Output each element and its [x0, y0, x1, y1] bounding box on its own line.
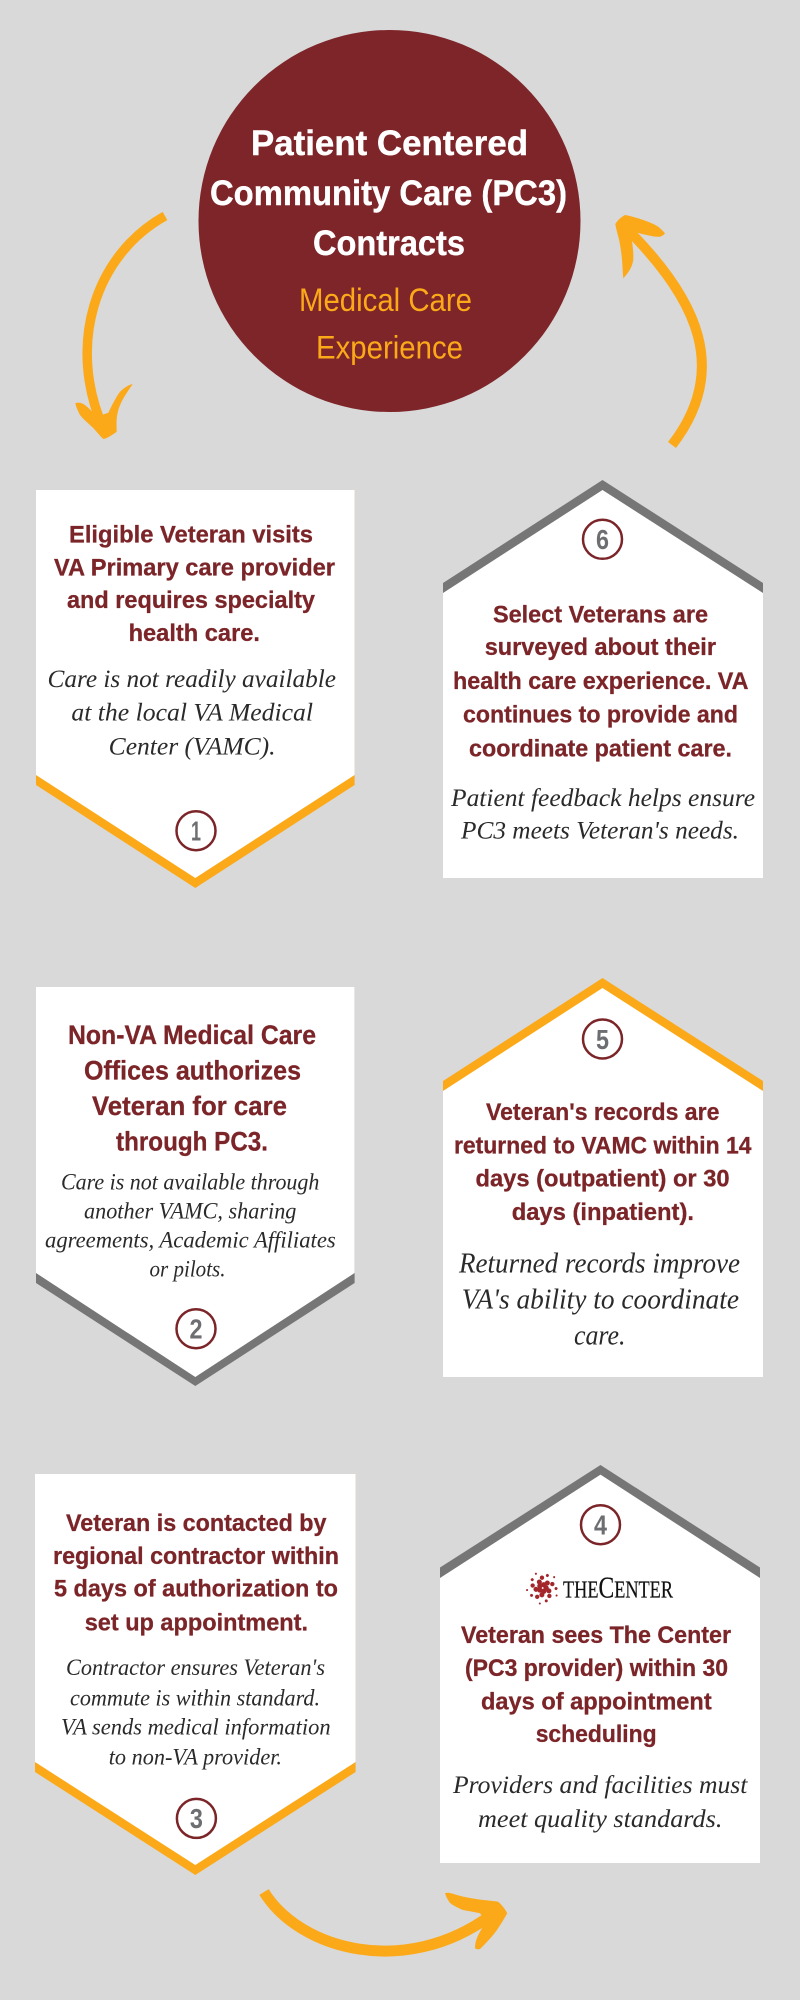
step 5 description: Returned records improve [458, 1249, 740, 1280]
step 5 heading: days (inpatient). [512, 1199, 694, 1226]
step 3 heading [53, 1510, 339, 1637]
step 5 description [458, 1249, 740, 1352]
step 3 number [177, 1799, 216, 1838]
step 4 number: 4 [594, 1510, 607, 1540]
step 3 number: 3 [190, 1803, 203, 1834]
step 6 description: Patient feedback helps ensure [450, 785, 755, 812]
step 3 heading: 5 days of authorization to [54, 1576, 338, 1603]
step 1 description: Care is not readily available [48, 666, 336, 693]
arrow: circle to step 1 [75, 216, 165, 439]
step 2 number [176, 1309, 216, 1348]
step 1 heading: health care. [129, 620, 260, 647]
subtitle [299, 282, 472, 366]
step 2 description: agreements, Academic Affiliates [45, 1227, 336, 1252]
logo: The Center: THECENTER [563, 1569, 673, 1604]
title: Contracts [313, 224, 465, 263]
step 4 heading: (PC3 provider) within 30 [465, 1655, 728, 1682]
step 1 description: Center (VAMC). [109, 734, 276, 761]
step 4 description [452, 1772, 748, 1833]
step 2 heading: Non-VA Medical Care [68, 1020, 316, 1050]
step 4 heading: days of appointment [481, 1689, 712, 1716]
step 2 heading: Offices authorizes [84, 1055, 301, 1085]
title: Patient Centered [251, 124, 528, 163]
step 1 description: at the local VA Medical [71, 700, 313, 727]
panel: step 6 [443, 480, 763, 878]
step 4 heading: scheduling [536, 1721, 657, 1748]
subtitle: Experience [316, 330, 463, 366]
step 1 heading: Eligible Veteran visits [69, 522, 313, 549]
step 3 heading: Veteran is contacted by [66, 1510, 327, 1537]
arrow: step 6 to circle [615, 215, 702, 445]
step 5 number [583, 1020, 622, 1058]
panel: step 2 [36, 987, 355, 1386]
step 6 heading [453, 602, 749, 763]
step 1 description [48, 666, 336, 761]
step 2 description: or pilots. [150, 1257, 226, 1282]
step 3 description: commute is within standard. [70, 1685, 320, 1710]
title circle [198, 30, 580, 412]
step 2 heading: Veteran for care [92, 1091, 287, 1121]
arrow: step 3 to step 4 [264, 1892, 507, 1951]
step 3 description: to non-VA provider. [109, 1744, 282, 1769]
step 2 description: Care is not available through [61, 1169, 319, 1194]
step 6 heading: health care experience. VA [453, 668, 749, 695]
subtitle: Medical Care [299, 282, 472, 318]
step 2 description [45, 1169, 336, 1282]
step 4 number [581, 1505, 620, 1544]
title [210, 124, 567, 263]
step 1 heading: and requires specialty [67, 587, 315, 614]
step 3 heading: regional contractor within [53, 1543, 339, 1570]
step 5 heading: returned to VAMC within 14 [454, 1133, 752, 1160]
step 1 number [176, 811, 216, 850]
step 6 heading: continues to provide and [463, 702, 738, 729]
step 5 heading: days (outpatient) or 30 [476, 1166, 730, 1193]
step 1 number: 1 [191, 816, 201, 846]
step 3 description: Contractor ensures Veteran's [66, 1655, 325, 1680]
step 1 heading [54, 522, 335, 647]
step 2 heading [68, 1020, 316, 1157]
step 2 heading: through PC3. [116, 1127, 268, 1157]
step 3 description [61, 1655, 331, 1769]
step 2 description: another VAMC, sharing [84, 1198, 296, 1223]
step 5 number: 5 [596, 1024, 609, 1055]
step 5 description: VA's ability to coordinate [462, 1285, 739, 1316]
panel: step 4 [440, 1465, 760, 1863]
panel: step 5 [443, 978, 763, 1377]
step 2 number: 2 [190, 1314, 202, 1344]
step 4 heading [461, 1622, 731, 1748]
panel: step 1 [36, 490, 355, 888]
step 1 heading: VA Primary care provider [54, 555, 335, 582]
step 6 description [450, 785, 755, 845]
step 5 heading [454, 1099, 752, 1226]
step 6 number [583, 520, 622, 559]
logo: The Center [526, 1569, 673, 1605]
step 5 description: care. [574, 1321, 626, 1352]
step 4 heading: Veteran sees The Center [461, 1622, 731, 1649]
step 6 heading: Select Veterans are [493, 602, 708, 629]
step 6 heading: surveyed about their [485, 634, 716, 661]
step 4 description: meet quality standards. [478, 1806, 722, 1833]
title: Community Care (PC3) [210, 174, 567, 213]
panel: step 3 [35, 1474, 356, 1875]
step 4 description: Providers and facilities must [452, 1772, 748, 1799]
step 6 heading: coordinate patient care. [469, 736, 732, 763]
step 5 heading: Veteran's records are [486, 1099, 719, 1126]
step 3 heading: set up appointment. [85, 1610, 308, 1637]
step 6 number: 6 [596, 524, 609, 555]
step 6 description: PC3 meets Veteran's needs. [460, 818, 739, 845]
step 3 description: VA sends medical information [61, 1715, 331, 1740]
